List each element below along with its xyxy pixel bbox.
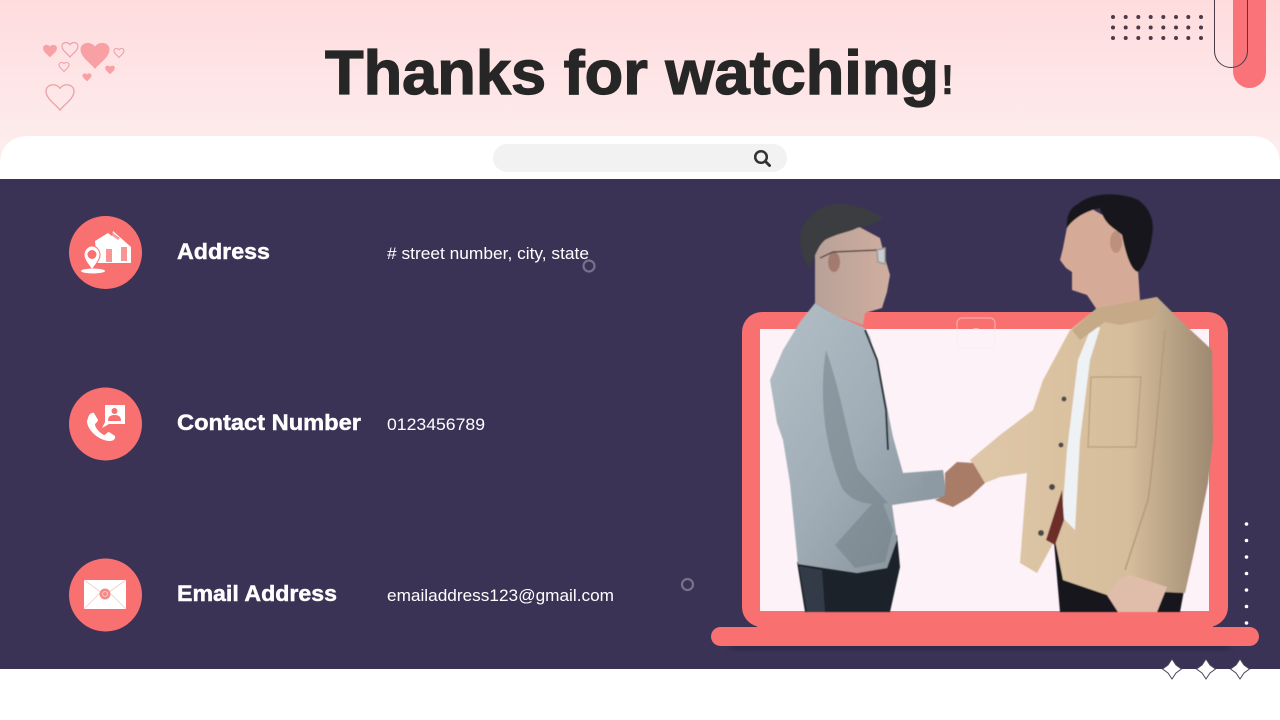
laptop illustration [711, 312, 1259, 650]
dark inner shirt [1046, 490, 1064, 545]
photo: man in beige jacket [970, 194, 1213, 612]
jacket collar [1072, 297, 1157, 340]
hand in pocket [1107, 575, 1167, 612]
top pink header band [0, 0, 1280, 179]
navy content panel [0, 179, 1280, 669]
trousers [1053, 530, 1185, 612]
value: phone number: 0123456789 [387, 415, 485, 434]
laptop base shadow [730, 640, 1230, 650]
hair [1067, 194, 1153, 272]
laptop screen [760, 329, 1209, 611]
value: email: emailaddress123@gmail.com [387, 586, 614, 605]
trousers [797, 535, 900, 612]
jacket buttons [1038, 396, 1066, 536]
photo: man in grey shirt [770, 204, 947, 612]
t-shirt [1062, 323, 1100, 530]
icon: envelope [69, 558, 142, 632]
chest pocket [1088, 377, 1141, 447]
icon: phone with contact bubble [69, 388, 142, 460]
hair [800, 204, 883, 268]
denim highlight [799, 566, 825, 612]
jacket [970, 297, 1213, 595]
neck and face [815, 222, 890, 325]
icon: cluster of hearts [43, 43, 124, 110]
glasses [820, 248, 885, 264]
decoration: outlined pill [1214, 0, 1248, 68]
ear [1110, 231, 1122, 253]
neck and face [1060, 205, 1140, 310]
heading: email address: Email Address [177, 581, 337, 606]
heading: contact number: Contact Number [177, 410, 361, 435]
heading: address: Address [177, 239, 270, 264]
laptop base [711, 627, 1259, 646]
shirt fold shadows [823, 350, 893, 568]
search bar [493, 144, 787, 172]
decoration: stars [1162, 659, 1250, 679]
laptop lower body fill [757, 611, 1213, 629]
white browser bar [0, 136, 1280, 179]
photo: clasped hands [935, 462, 985, 507]
ghost webcam mark [957, 318, 995, 348]
decoration: small ring [584, 260, 594, 272]
laptop frame [742, 312, 1228, 627]
contact row: address [69, 216, 589, 289]
contact row: phone [69, 388, 485, 460]
cuff shade [922, 470, 947, 500]
value: address: # street number, city, state [387, 244, 589, 263]
decoration: small ring [682, 579, 693, 590]
icon: magnifier [755, 151, 770, 166]
shirt [770, 303, 947, 573]
sleeve edge [1125, 330, 1165, 570]
ear [828, 252, 840, 272]
icon: house with pin [69, 216, 142, 289]
decoration: vertical dots [1245, 522, 1248, 625]
title: ! [941, 56, 954, 103]
contact row: email [69, 558, 614, 632]
title: Thanks for watching [325, 39, 939, 108]
decoration: coral pill [1233, 0, 1266, 88]
decoration: dot grid [1111, 15, 1203, 40]
shirt placket [865, 330, 888, 450]
